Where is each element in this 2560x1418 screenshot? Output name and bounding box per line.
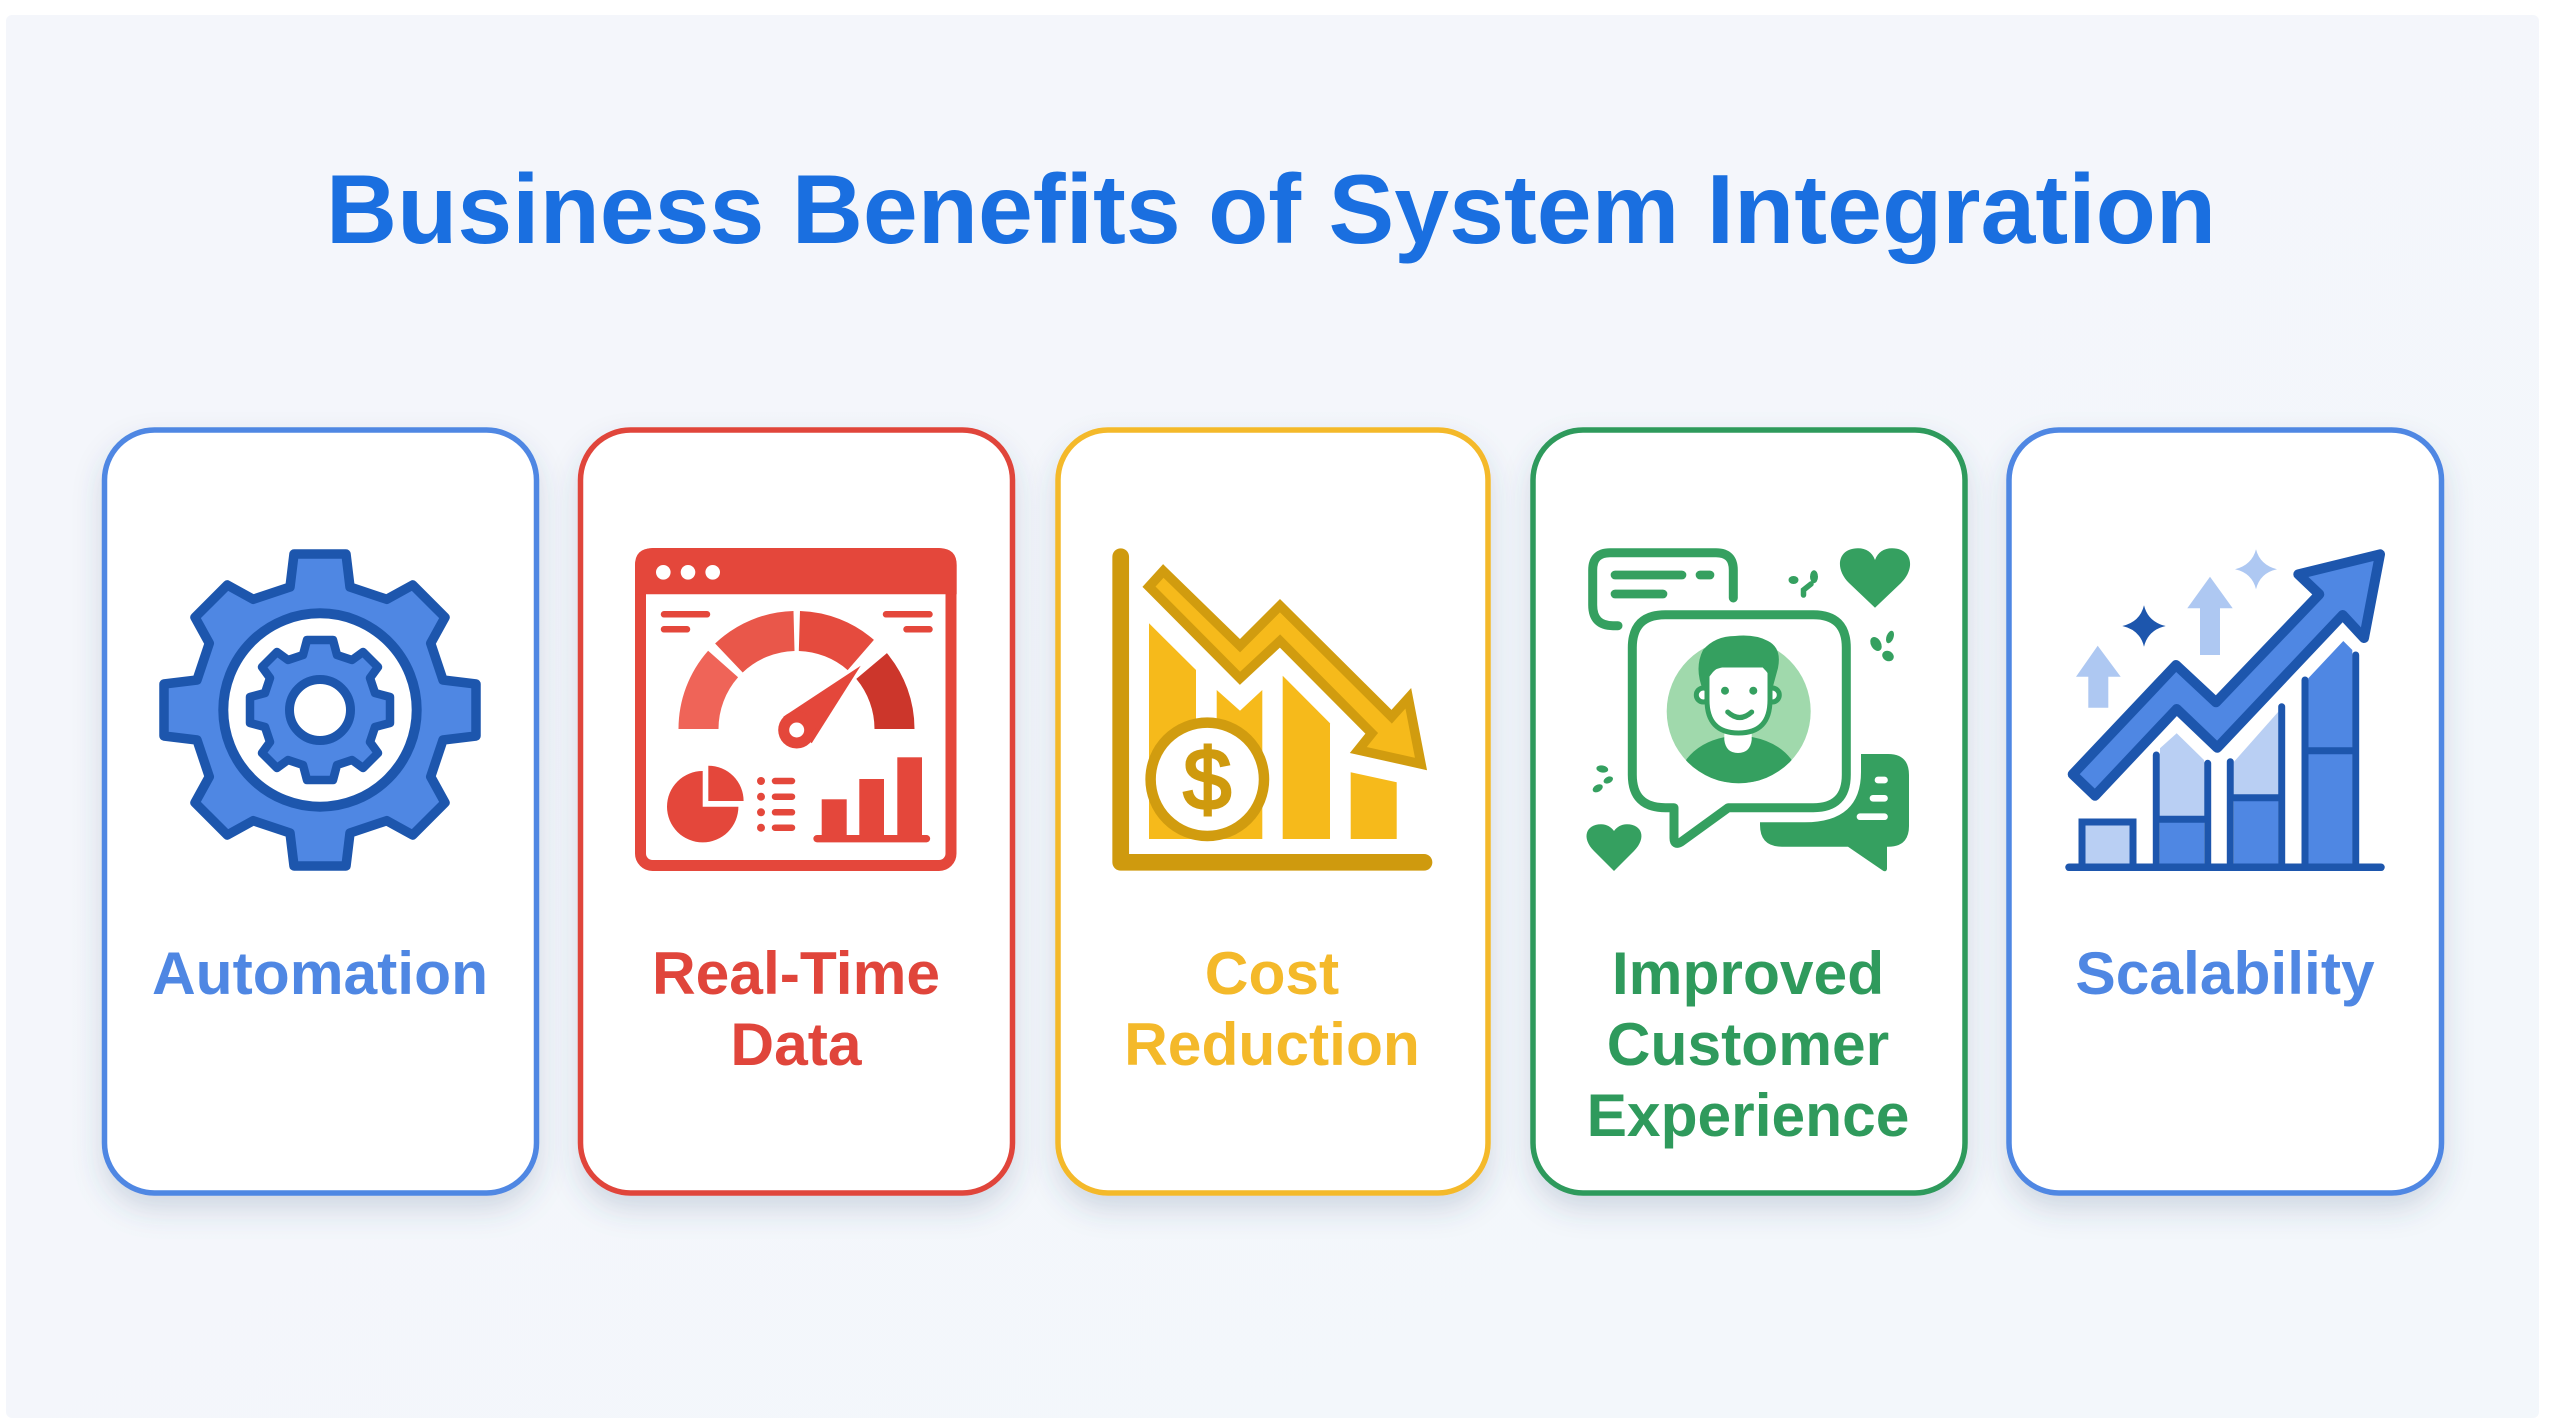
label: Real-Time Data: Data <box>730 1010 863 1078</box>
card frame <box>1058 430 1488 1193</box>
icon: dashboard <box>635 548 957 866</box>
icon: customer chat <box>1587 548 1910 871</box>
icon: falling cost chart <box>1121 557 1424 862</box>
label: Improved Customer Experience <box>1587 939 1909 1149</box>
label: Scalability: Scalability <box>2075 939 2375 1007</box>
card frame <box>2009 430 2442 1193</box>
label: Improved Customer Experience: Experience <box>1587 1081 1909 1149</box>
label: Cost Reduction: Reduction <box>1124 1010 1420 1078</box>
label: Automation: Automation <box>152 939 488 1007</box>
label: Real-Time Data <box>652 939 940 1078</box>
label: Cost Reduction <box>1124 939 1420 1078</box>
icon: gear <box>164 554 476 866</box>
card frame <box>1533 430 1965 1193</box>
label: Improved Customer Experience: Improved <box>1612 939 1884 1007</box>
panel: Improved Customer Experience <box>1533 430 1965 1193</box>
icon: falling cost chart: $ <box>1183 732 1231 828</box>
label: Improved Customer Experience: Customer <box>1607 1010 1889 1078</box>
card frame <box>580 430 1012 1193</box>
panel: Automation <box>104 430 536 1193</box>
panel: Real-Time Data <box>580 430 1012 1193</box>
panel: Cost Reduction <box>1058 430 1488 1193</box>
title: Business Benefits of System Integration <box>326 154 2216 264</box>
label: Real-Time Data: Real-Time <box>652 939 940 1007</box>
label: Cost Reduction: Cost <box>1205 939 1339 1007</box>
card frame <box>104 430 536 1193</box>
icon: growth chart <box>2069 549 2381 868</box>
panel: Scalability <box>2009 430 2442 1193</box>
